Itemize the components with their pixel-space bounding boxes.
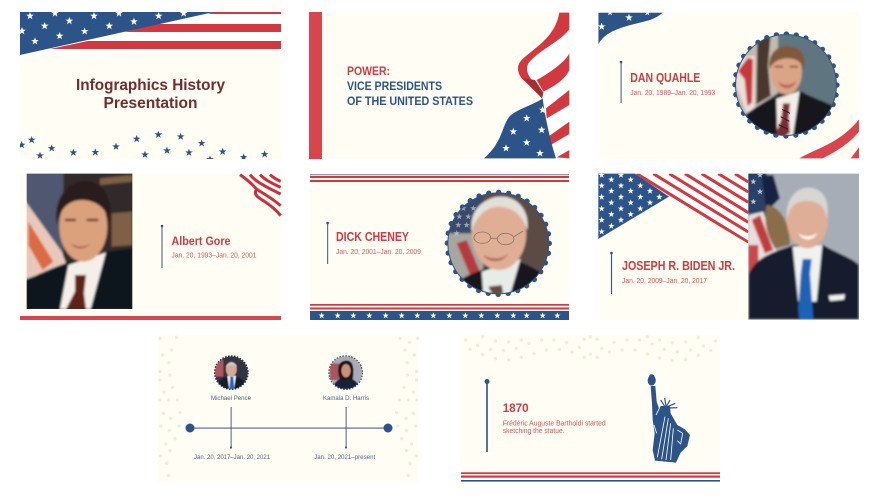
dates: Pence: Jan. 20, 2017–Jan. 20, 2021: [194, 454, 270, 461]
name: Michael Pence: Michael Pence: [211, 395, 251, 402]
corner stripes: [240, 175, 281, 216]
timeline tick: Harris: [345, 407, 347, 449]
top stripes: [310, 174, 569, 182]
dates: Jan. 20, 2001–Jan. 20, 2009: [336, 249, 421, 256]
scattered stars: [20, 130, 268, 159]
dotted top band: [464, 335, 717, 362]
bottom stripes with stars: [310, 304, 569, 320]
description line two: sketching the statue.: [503, 428, 565, 435]
red side bar: [309, 12, 322, 159]
name: Kamala Harris: Kamala D. Harris: [323, 395, 370, 402]
bottom stripes: [461, 472, 720, 482]
corner stripes: [799, 119, 859, 158]
dates: Harris: Jan. 20, 2021–present: [314, 454, 375, 461]
panel: statue slide: [461, 335, 720, 482]
timeline marker: [161, 225, 163, 268]
panel: Dick Cheney slide: [310, 174, 569, 320]
name: DAN QUAHLE: [630, 71, 700, 85]
timeline marker: [620, 61, 622, 103]
portrait: Kamala Harris: [328, 355, 365, 392]
panel: title slide: [18, 9, 281, 163]
corner flag: [598, 9, 663, 44]
timeline axis: [186, 424, 392, 432]
portrait photo: [23, 172, 137, 312]
name: DICK CHENEY: [336, 230, 410, 244]
name: Albert Gore: [172, 236, 230, 248]
title: Infographics History: [76, 77, 225, 94]
title line two: Presentation: [104, 95, 198, 112]
heading: power: POWER:: [347, 64, 390, 78]
flag banner: [18, 9, 281, 55]
portrait badge: [447, 192, 553, 298]
year: 1870: [503, 401, 529, 415]
diagonal flag: [598, 172, 748, 244]
portrait photo: [747, 172, 862, 322]
dates: Jan. 20, 1993–Jan. 20, 2001: [172, 253, 257, 260]
bottom bar: [20, 316, 281, 320]
heading: of the united states: OF THE UNITED STATES: [347, 94, 473, 108]
heading: vice presidents: VICE PRESIDENTS: [347, 79, 442, 93]
dotted edges: [158, 336, 419, 477]
panel: timeline slide: [158, 335, 419, 482]
dates: Jan. 20, 1989–Jan. 20, 1993: [630, 90, 715, 97]
panel: power slide: [309, 12, 570, 159]
panel: Joseph R. Biden Jr. slide: [598, 172, 862, 322]
dates: Jan. 20, 2009–Jan. 20, 2017: [622, 278, 707, 285]
panel: Albert Gore slide: [20, 172, 281, 320]
timeline marker: [484, 379, 490, 452]
panel: Dan Quayle slide: [598, 9, 859, 159]
portrait: Michael Pence: [213, 355, 250, 392]
icon: statue of liberty: [648, 374, 690, 463]
waving flag: [484, 13, 569, 158]
description line one: Frédéric Auguste Bartholdi started: [503, 421, 606, 428]
timeline marker: [610, 252, 613, 294]
timeline marker: [326, 222, 329, 264]
name: JOSEPH R. BIDEN JR.: [622, 259, 735, 273]
portrait badge: [732, 31, 840, 139]
timeline tick: Pence: [230, 407, 232, 449]
